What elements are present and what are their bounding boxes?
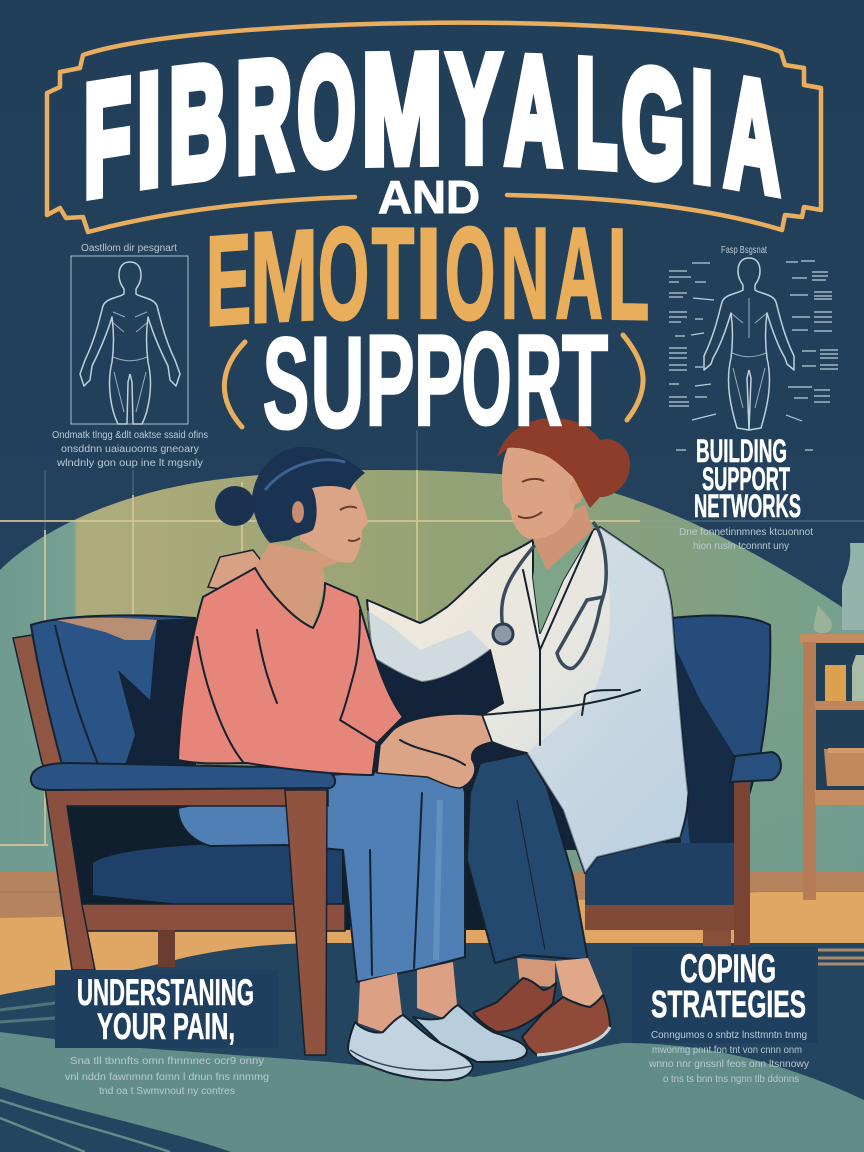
title: FIBROMYALGIA: L: [576, 28, 617, 199]
title: EMOTIONAL: O: [445, 201, 495, 348]
title: EMOTIONAL: O: [318, 201, 369, 349]
title: EMOTIONAL: M: [250, 203, 318, 351]
heading: building support networks: [679, 433, 813, 552]
title: EMOTIONAL: E: [206, 206, 251, 353]
shirt: [533, 530, 593, 633]
heading: building support networks: SUPPORT: [702, 461, 790, 497]
doctor ankles: [517, 958, 555, 987]
title: SUPPORT: P: [365, 308, 415, 453]
sofa back and seats: [13, 615, 781, 967]
title: FIBROMYALGIA: M: [362, 23, 442, 196]
panel: understanding your pain: [55, 970, 278, 1097]
scene: clinic room: [0, 430, 864, 1152]
title: FIBROMYALGIA: Y: [447, 24, 501, 193]
wood back frame: [13, 635, 68, 790]
left back cushion: [31, 615, 195, 768]
doctor hair: [497, 418, 630, 508]
title: FIBROMYALGIA: B: [169, 30, 227, 215]
bookshelf: [800, 543, 864, 900]
doctor: [367, 418, 688, 1055]
diagram caption: Oastllom dir pesgnart: [81, 243, 177, 254]
body outline: [80, 262, 180, 424]
title: FIBROMYALGIA: G: [622, 35, 684, 211]
dark sofa interior: [350, 640, 690, 850]
panel: understanding your pain: UNDERSTANING: [77, 972, 254, 1013]
title: EMOTIONAL: N: [500, 200, 550, 346]
title: FIBROMYALGIA: F: [84, 48, 131, 230]
diagram caption: Fasp Bsgsnat: [721, 245, 767, 256]
patient shoes: [413, 1005, 527, 1062]
title: EMOTIONAL: I: [415, 200, 442, 346]
title: SUPPORT: T: [562, 308, 608, 453]
small text: Dne fonnetinnmnes ktcuonnot: [679, 527, 813, 538]
title: SUPPORT: O: [461, 306, 512, 453]
title: SUPPORT: R: [515, 308, 562, 453]
patient jeans: [178, 767, 465, 982]
parentheses: [224, 335, 643, 427]
title: FIBROMYALGIA: [84, 23, 779, 230]
title: SUPPORT: P: [414, 308, 463, 453]
panel: coping strategies: [632, 947, 864, 1085]
patient sweater: [178, 568, 403, 775]
title: FIBROMYALGIA: I: [137, 40, 161, 219]
diagram description: wlndnly gon oup ine lt mgsnly: [56, 458, 203, 469]
annotation lines: [669, 261, 838, 450]
patient ankles: [358, 973, 402, 1032]
patient neck: [255, 543, 347, 628]
title: FIBROMYALGIA: I: [691, 41, 713, 215]
rails and rear legs: [70, 904, 345, 931]
patient legs: [178, 767, 527, 1080]
title: AND: AND: [378, 171, 480, 223]
diagram description: Ondmatk tlngg &dlt oaktse ssaid ofins: [52, 430, 208, 441]
seats: [93, 842, 342, 906]
patient hair: [252, 447, 365, 543]
diagram description: onsddnn uaiauooms gneoary: [61, 444, 199, 455]
title: SUPPORT: S: [263, 311, 309, 457]
title: EMOTIONAL: T: [372, 201, 414, 347]
title: EMOTIONAL: [206, 200, 649, 353]
small text: Conngumos o snbtz lnsttmntn tnmg: [651, 1030, 807, 1041]
panel: coping strategies: wnno nnr gnssnl feos onn ltsnnowy: [648, 1059, 809, 1070]
small text: Sna tll tbnnfts omn fhnmnec ocr9 onny: [70, 1056, 264, 1067]
left body diagram: [52, 243, 208, 469]
panel: coping strategies: o tns ts bnn tns ngnn tlb ddonns: [663, 1074, 799, 1085]
body outline: [704, 258, 794, 430]
title: FIBROMYALGIA: A: [505, 26, 562, 196]
doctor trousers: [467, 753, 588, 963]
title: FIBROMYALGIA: O: [298, 26, 355, 198]
panel: understanding your pain: tnd oa t Swmvnout ny contres: [99, 1086, 235, 1097]
coat shading: [527, 527, 688, 873]
title: FIBROMYALGIA: R: [236, 28, 292, 204]
title: FIBROMYALGIA: A: [725, 44, 779, 226]
doctor coat: [367, 527, 688, 873]
hands: [377, 714, 492, 788]
right back cushion: [672, 616, 770, 845]
title: SUPPORT: [263, 306, 608, 457]
heading: building support networks: hion rusln tconnnt uny: [693, 541, 789, 552]
panel: understanding your pain: YOUR PAIN,: [97, 1006, 235, 1047]
patient upper body: [178, 447, 492, 788]
title: SUPPORT: U: [310, 311, 365, 455]
panel: coping strategies: COPING: [680, 947, 776, 991]
title frame: [47, 23, 821, 232]
patient face: [300, 473, 368, 563]
panel: coping strategies: mwonmg pnnt fon tnt von cnnn onm: [652, 1045, 802, 1056]
doctor hand on shoulder: [208, 550, 263, 590]
title: EMOTIONAL: A: [555, 201, 603, 346]
title: EMOTIONAL: L: [608, 201, 649, 347]
doctor shoes: [473, 978, 556, 1032]
heading: building support networks: BUILDING: [696, 433, 787, 469]
right body diagram: [669, 245, 838, 450]
doctor neck and head: [530, 505, 593, 570]
panel: understanding your pain: vnl nddn fawnmnn fomn l dnun fns nnmmg: [65, 1072, 269, 1083]
stethoscope: [502, 522, 606, 668]
diagram description: [52, 430, 208, 469]
chair front frame and armrest: [31, 763, 335, 1055]
